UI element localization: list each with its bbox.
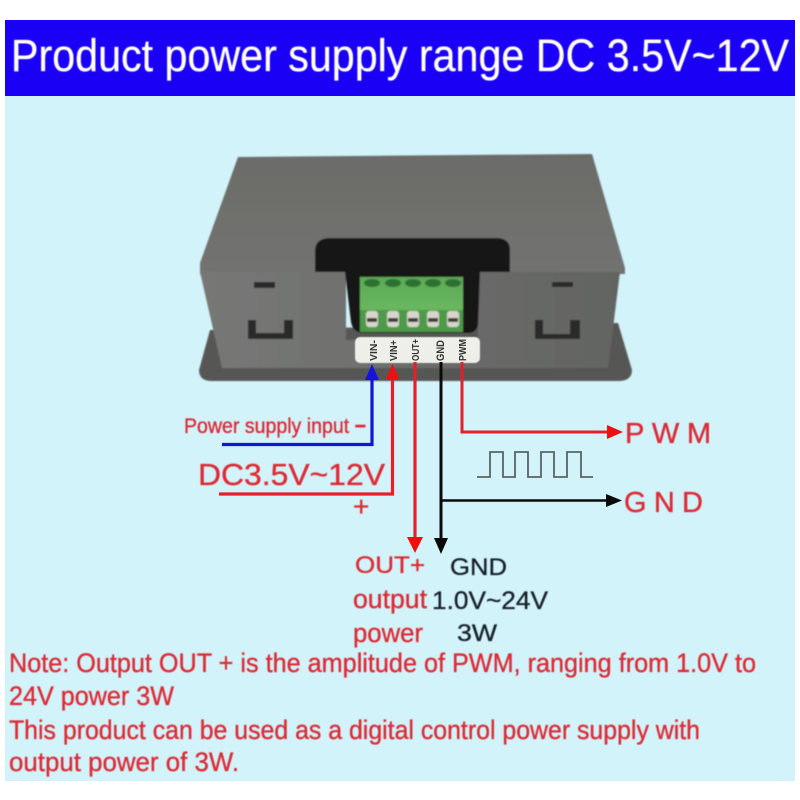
- label: output voltage value: 1.0V~24V: [432, 587, 548, 615]
- label: GND: GND: [624, 487, 703, 519]
- label: power value: 3W: [457, 620, 497, 647]
- device front face: [200, 272, 620, 368]
- green terminal block: [360, 277, 463, 332]
- arrow: GND branch: [441, 494, 622, 507]
- arrow: GND output: [434, 362, 448, 554]
- terminal label strip: [355, 337, 480, 363]
- note text: Note: Output OUT + is the amplitude of PWM, ranging from 1.0V to: [9, 648, 756, 678]
- terminal label strip: OUT+: [410, 339, 422, 361]
- title banner: [5, 20, 795, 96]
- arrow: PWM: [462, 362, 623, 439]
- terminal label strip: VIN-: [368, 339, 380, 361]
- left clip recess: [248, 320, 293, 339]
- terminal label strip: GND: [435, 340, 447, 361]
- label: DC voltage range: DC3.5V~12V: [198, 457, 385, 492]
- device top face: [200, 154, 625, 274]
- terminal label strip: PWM: [457, 339, 469, 361]
- device flange: [199, 323, 632, 381]
- arrow: OUT+ output: [407, 362, 423, 553]
- terminal label strip: VIN+: [388, 340, 400, 361]
- arrow: power supply negative: [222, 364, 379, 444]
- label: PWM: PWM: [625, 418, 711, 450]
- note text: 24V power 3W: [9, 681, 174, 711]
- note text: This product can be used as a digital control power supply with: [9, 715, 700, 745]
- label: GND value: GND: [450, 554, 507, 581]
- note text: [9, 648, 756, 777]
- right clip recess: [535, 320, 580, 339]
- label: power: power: [353, 618, 423, 648]
- label: OUT+: OUT+: [355, 552, 425, 579]
- arrow: power supply positive: [219, 364, 400, 494]
- label: power supply input: Power supply input −: [184, 415, 366, 438]
- device photo: [199, 154, 632, 381]
- PWM square wave: [477, 452, 593, 477]
- note text: output power of 3W.: [9, 747, 239, 777]
- terminal opening: [315, 238, 510, 333]
- left vent slot: [254, 282, 275, 288]
- right vent slot: [552, 282, 573, 287]
- label: output: output: [353, 584, 427, 614]
- label: plus: +: [353, 491, 369, 522]
